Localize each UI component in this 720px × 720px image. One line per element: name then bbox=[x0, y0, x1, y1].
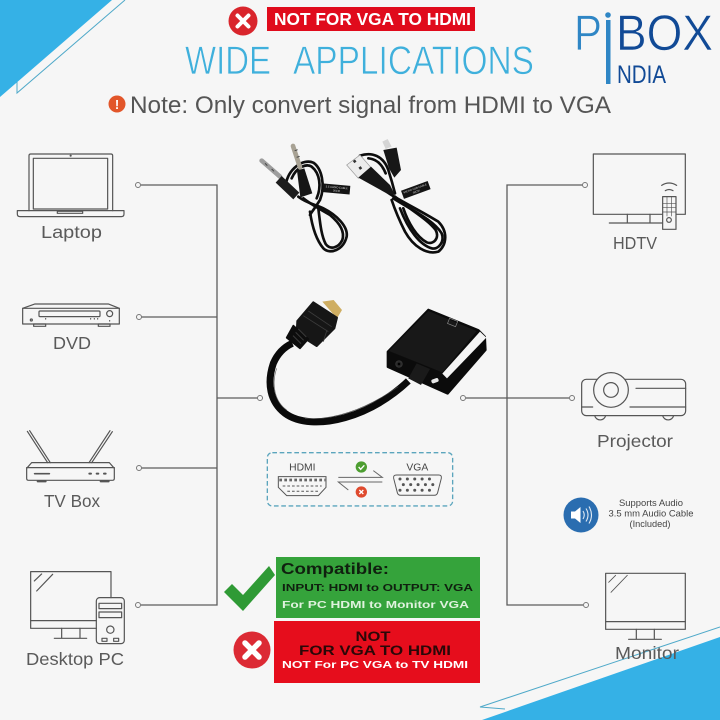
logo: PiBOX India bbox=[574, 5, 713, 89]
USB plug bbox=[347, 155, 372, 178]
adapter body bbox=[388, 310, 486, 394]
VGA label: VGA bbox=[406, 463, 428, 474]
USB cable photo bbox=[347, 139, 445, 252]
not compatible panel bbox=[274, 621, 480, 683]
not compatible panel: NOT For PC VGA to TV HDMI bbox=[282, 659, 468, 671]
audio cable photo bbox=[262, 146, 350, 251]
cable loops bbox=[286, 162, 347, 251]
icon: laptop bbox=[17, 154, 124, 217]
icon: check bbox=[356, 461, 367, 473]
label: projector: Projector bbox=[597, 431, 673, 451]
label: monitor: Monitor bbox=[615, 643, 679, 663]
label: TV box: TV Box bbox=[44, 491, 100, 511]
device: TV box bbox=[27, 431, 114, 511]
logo: PiBOX India: NDIA bbox=[617, 61, 666, 89]
note line: ! bbox=[115, 97, 119, 112]
title bbox=[185, 39, 534, 83]
icon: projector bbox=[582, 373, 686, 420]
not compatible panel: FOR VGA TO HDMI bbox=[299, 642, 451, 658]
logo: PiBOX India: P bbox=[574, 5, 602, 61]
audio note bbox=[564, 498, 694, 532]
HDMI to VGA diagram bbox=[267, 453, 453, 506]
icon: HDTV with remote bbox=[593, 154, 685, 229]
label: HDTV: HDTV bbox=[613, 233, 657, 253]
text: audio support: Supports Audio bbox=[619, 498, 683, 508]
cable loops bbox=[360, 154, 445, 252]
device: DVD bbox=[23, 304, 119, 353]
compatible panel: INPUT: HDMI to OUTPUT: VGA bbox=[282, 582, 474, 594]
icon: desktop PC bbox=[31, 572, 124, 644]
icon: HDMI port bbox=[278, 477, 326, 496]
icon: cross bbox=[356, 486, 367, 498]
tag: 3.5 AUDIO CABLE bbox=[326, 184, 348, 190]
text: audio support: 3.5 mm Audio Cable bbox=[608, 508, 694, 518]
audio plugs bbox=[262, 161, 280, 177]
HDMI to VGA adapter photo bbox=[270, 300, 486, 422]
icon: monitor bbox=[606, 573, 685, 639]
icon: TV box bbox=[27, 431, 114, 481]
tag: 30CM bbox=[412, 188, 420, 195]
logo: PiBOX India: BOX bbox=[616, 5, 713, 61]
top-left corner accent bbox=[0, 0, 125, 97]
bottom-right corner accent bbox=[480, 627, 720, 720]
warning badge: not for VGA to HDMI bbox=[228, 6, 475, 36]
tag: MICRO USB CABLE bbox=[403, 182, 427, 195]
connector lines left bbox=[136, 182, 263, 608]
icon: red cross bbox=[234, 632, 270, 668]
not compatible panel: NOT bbox=[356, 628, 391, 644]
label: desktop PC: Desktop PC bbox=[26, 649, 124, 669]
text: audio support bbox=[608, 498, 694, 529]
warning badge: not for VGA to HDMI: NOT FOR VGA TO HDMI bbox=[274, 9, 471, 29]
icon: DVD player bbox=[23, 304, 119, 326]
HDMI label: HDMI bbox=[289, 463, 316, 474]
icon: speaker bbox=[564, 498, 598, 532]
HDMI plug bbox=[322, 300, 342, 318]
tag bbox=[323, 184, 350, 194]
connector lines right bbox=[460, 182, 588, 608]
tag: 30CM bbox=[333, 188, 340, 193]
micro USB plug bbox=[382, 139, 392, 149]
compatible panel: Compatible: bbox=[281, 561, 389, 578]
tag bbox=[401, 181, 431, 199]
label: DVD: DVD bbox=[53, 333, 91, 353]
title: WIDE bbox=[185, 39, 271, 83]
title: APPLICATIONS bbox=[293, 39, 534, 83]
device: projector bbox=[582, 373, 686, 451]
cable bbox=[270, 343, 408, 422]
compatible panel: For PC HDMI to Monitor VGA bbox=[282, 599, 470, 611]
device: HDTV bbox=[593, 154, 685, 253]
text: audio support: (Included) bbox=[630, 519, 670, 529]
device: monitor bbox=[606, 573, 685, 663]
device: desktop PC bbox=[26, 572, 124, 669]
note line: Note: Only convert signal from HDMI to VGA bbox=[130, 92, 612, 119]
arrows bbox=[338, 471, 382, 490]
device: laptop bbox=[17, 154, 124, 242]
icon: green check mark bbox=[224, 566, 275, 611]
compatible panel bbox=[276, 557, 480, 618]
icon: VGA port bbox=[394, 475, 441, 495]
label: laptop: Laptop bbox=[41, 222, 102, 242]
